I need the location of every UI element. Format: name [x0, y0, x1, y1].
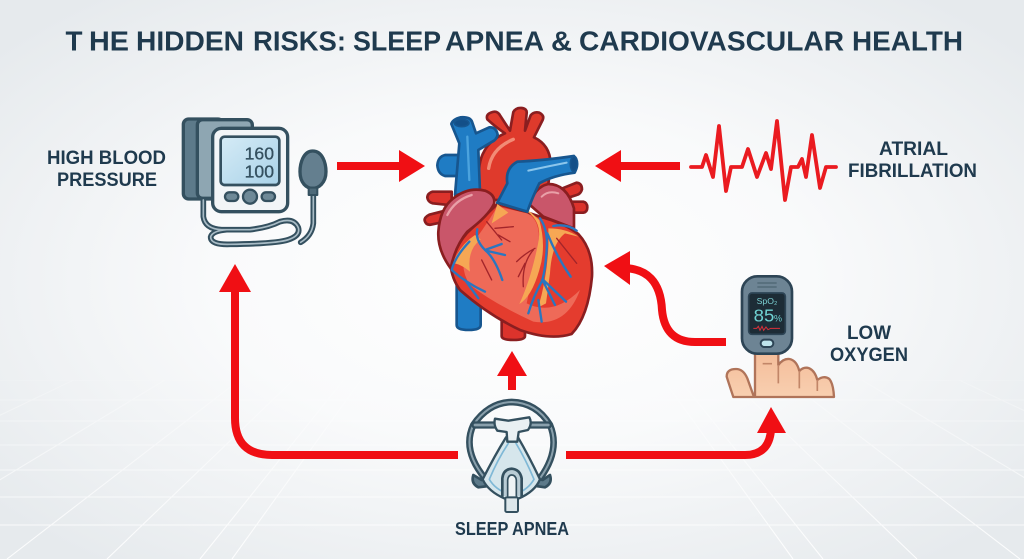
cuff: [183, 119, 223, 199]
bulb: [300, 151, 326, 188]
hand: [727, 352, 834, 397]
title: HE: [89, 26, 129, 56]
title: RISKS:: [253, 26, 346, 56]
superior vena cava: [451, 117, 498, 195]
strap connector: [495, 417, 531, 442]
label: low oxygen: LOW: [847, 323, 891, 344]
icon: heart: [425, 108, 592, 340]
title: SLEEP: [353, 26, 441, 56]
title: CARDIOVASCULAR: [579, 26, 844, 56]
mask shell: [483, 437, 540, 499]
icon: blood pressure monitor: [183, 119, 326, 244]
icon: blood pressure monitor: 100: [245, 162, 274, 182]
side vessels: [437, 155, 460, 176]
label: atrial fibrillation: FIBRILLATION: [848, 161, 977, 182]
tube: [203, 193, 313, 244]
left atrium: [438, 190, 494, 268]
arrow: blood pressure to heart: [337, 150, 425, 182]
icon: pulse oximeter on finger: %: [774, 314, 782, 324]
label: atrial fibrillation: [848, 139, 977, 182]
descending vessel: [457, 283, 481, 330]
right auricle: [530, 184, 574, 228]
coronary veins: [452, 218, 577, 322]
icon: cpap mask: [469, 402, 554, 512]
title: HEALTH: [852, 26, 963, 56]
label: low oxygen: OXYGEN: [830, 345, 908, 366]
arrow: low oxygen to heart: [604, 251, 726, 342]
arrow: atrial fibrillation to heart: [595, 150, 680, 182]
title: &: [551, 26, 572, 56]
title: [66, 26, 963, 56]
label: high blood pressure: HIGH BLOOD: [47, 148, 166, 169]
spo2 readout: SpO₂: [757, 296, 777, 306]
elbow: [502, 469, 522, 496]
screen: [221, 137, 279, 185]
label: high blood pressure: PRESSURE: [57, 170, 157, 191]
aorta: [478, 108, 551, 200]
pulmonary artery: [497, 156, 577, 212]
title: HIDDEN: [136, 26, 244, 56]
reading: 160: [245, 144, 274, 164]
icon: ecg trace: [691, 121, 836, 200]
fat bands: [497, 204, 543, 304]
arrow: sleep apnea to heart: [497, 351, 527, 390]
heart body: [451, 204, 592, 337]
label: sleep apnea: SLEEP APNEA: [455, 519, 569, 539]
label: atrial fibrillation: ATRIAL: [879, 139, 948, 160]
arrow: sleep apnea to low oxygen: [566, 407, 786, 455]
label: high blood pressure: [47, 148, 166, 191]
arrow: sleep apnea to blood pressure: [219, 264, 458, 455]
title: APNEA: [445, 26, 544, 56]
device: [742, 276, 792, 354]
buttons: [225, 192, 238, 201]
lower straps: [473, 475, 497, 487]
headgear: [469, 402, 554, 478]
monitor body: [213, 128, 288, 212]
coronary arteries: [482, 222, 577, 287]
title: T: [66, 26, 82, 56]
icon: pulse oximeter on finger: 85: [754, 306, 774, 326]
label: low oxygen: [830, 323, 908, 366]
icon: pulse oximeter on finger: [727, 276, 834, 397]
